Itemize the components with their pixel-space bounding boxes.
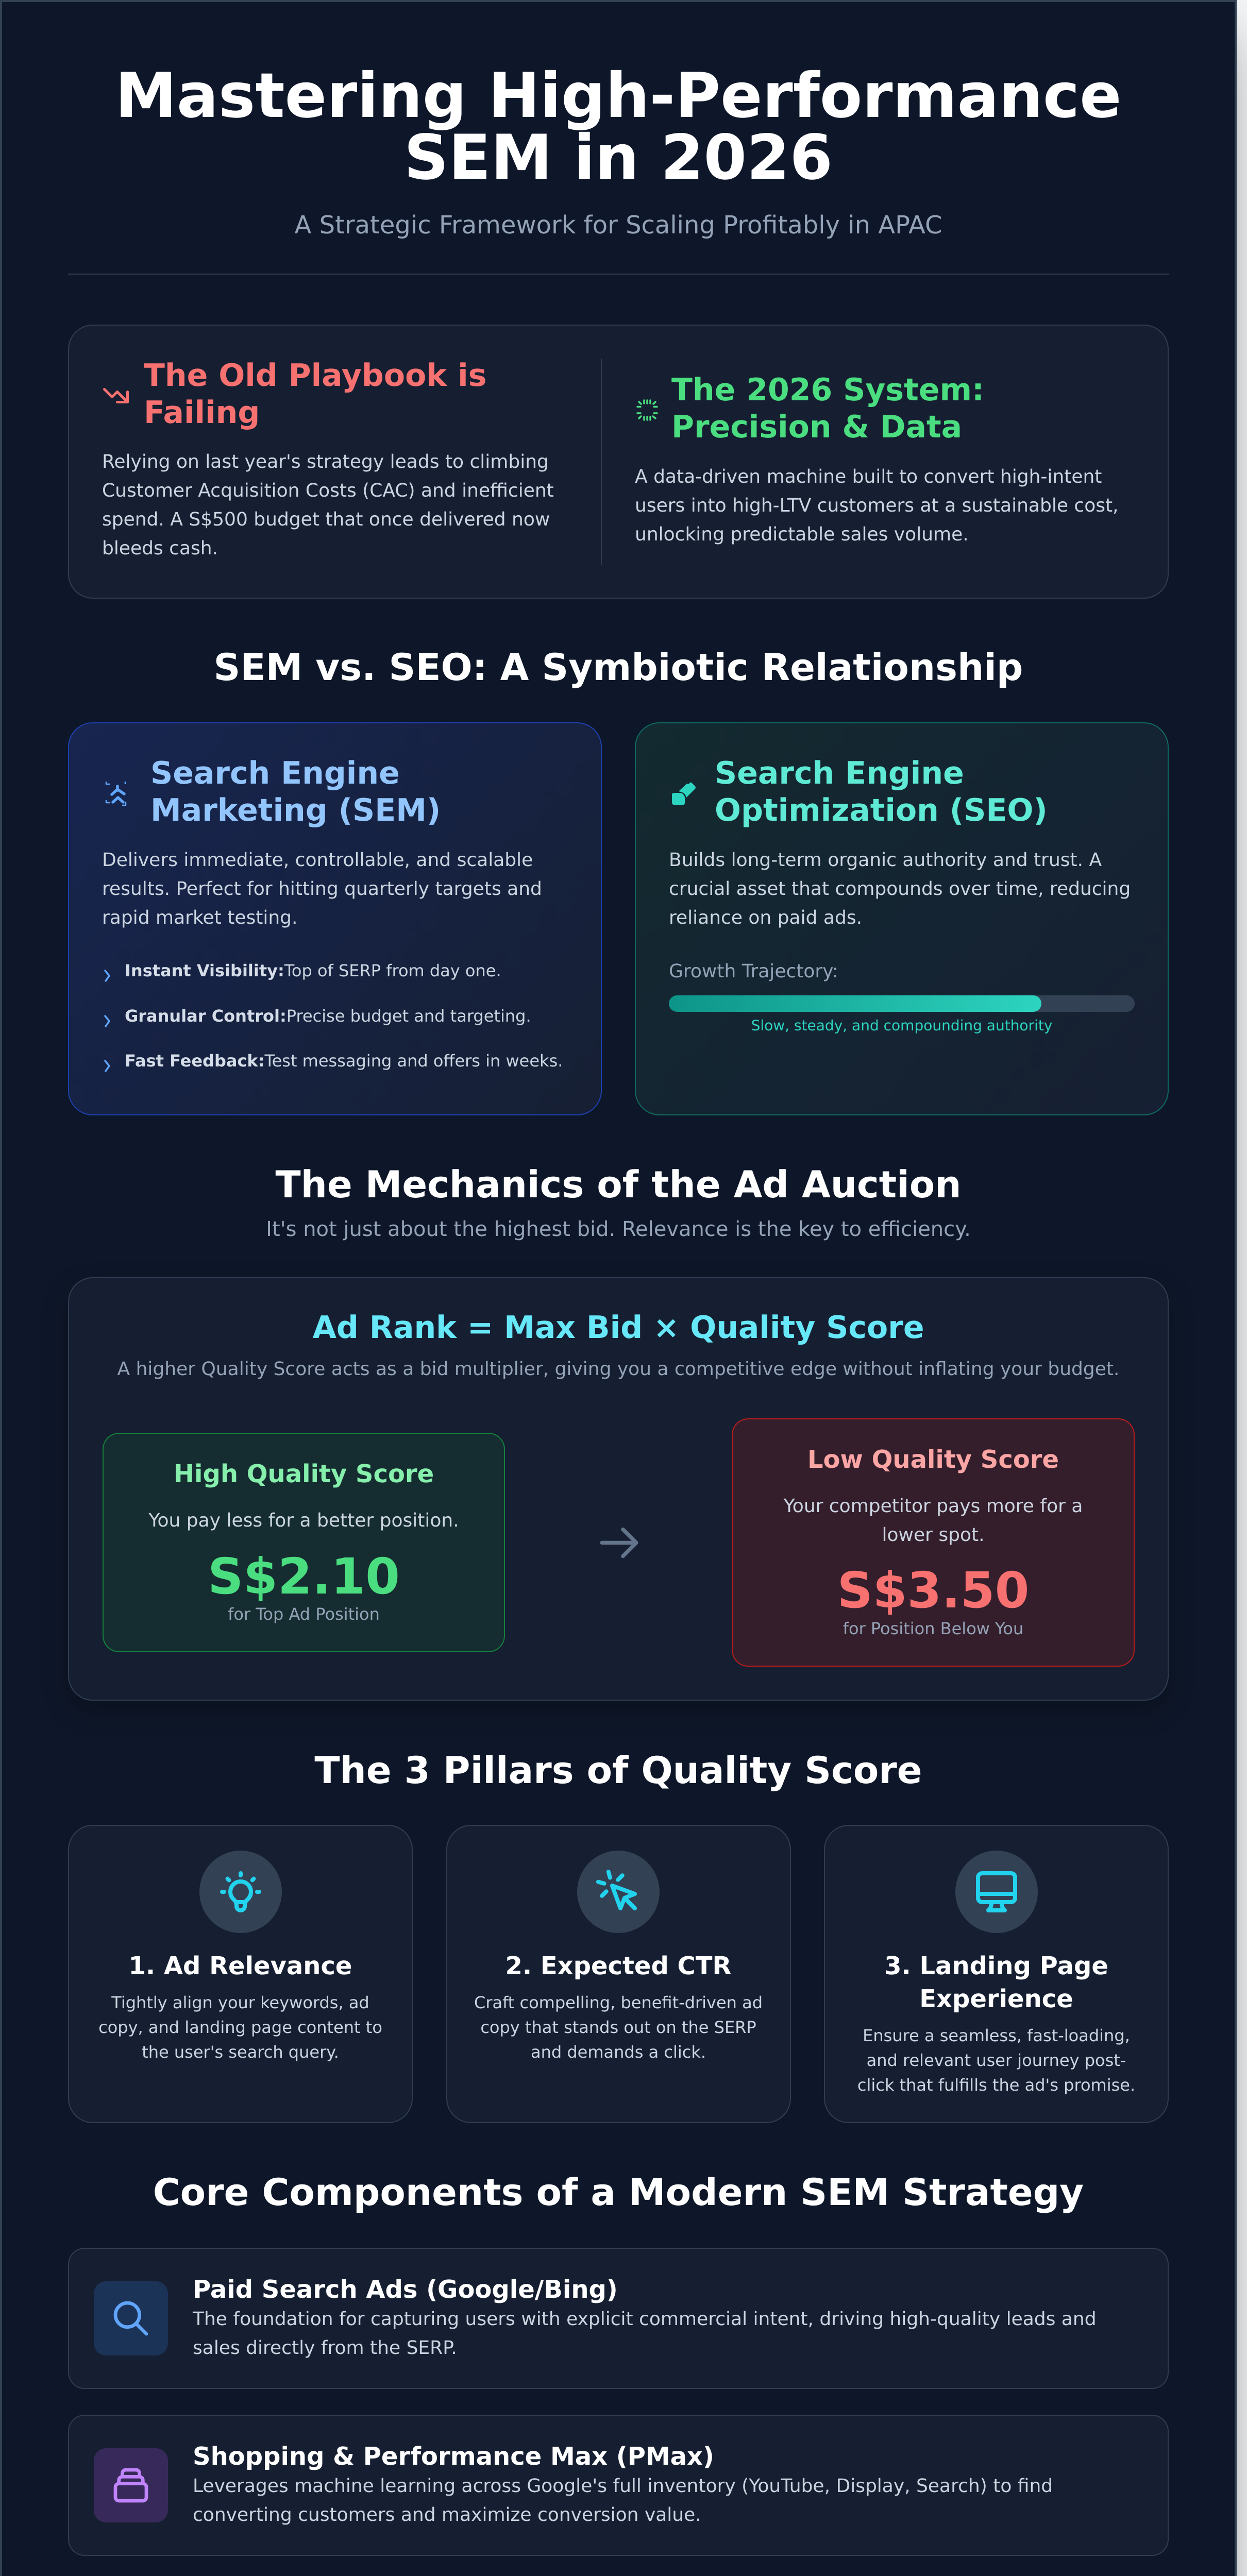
subtitle: A Strategic Framework for Scaling Profitably in APAC bbox=[295, 211, 942, 240]
card: high quality score bbox=[103, 1433, 505, 1652]
text: pillar 1 bbox=[98, 1993, 382, 2062]
panel: paid search bbox=[68, 2248, 1169, 2389]
icon: chip ring bbox=[636, 399, 658, 421]
icon: trending down bbox=[103, 388, 129, 403]
progress bar bbox=[669, 995, 1135, 1012]
text: pillar 1: the user's search query. bbox=[142, 2042, 339, 2062]
icon: cursor click bbox=[577, 1851, 660, 1933]
text: SEO: reliance on paid ads. bbox=[669, 907, 862, 928]
bullet: instant visibility: Instant Visibility:Top of SERP from day one. bbox=[125, 961, 501, 980]
text: high QS: You pay less for a better position. bbox=[148, 1510, 459, 1531]
heading: ad auction: The Mechanics of the Ad Auction bbox=[275, 1163, 962, 1206]
text: pillar 3: click that fulfills the ad's promise. bbox=[857, 2075, 1135, 2095]
text: old playbook: Relying on last year's strategy leads to climbing bbox=[102, 451, 549, 472]
heading: old playbook: The Old Playbook is bbox=[144, 358, 486, 394]
text: paid search: The foundation for capturing users with explicit commercial intent, driving high-quality leads and bbox=[193, 2309, 1097, 2330]
card: low quality score bbox=[732, 1418, 1135, 1667]
heading: paid search: Paid Search Ads (Google/Bing) bbox=[193, 2275, 618, 2304]
text: pillar 1: Tightly align your keywords, ad bbox=[111, 1993, 369, 2012]
icon: desktop computer bbox=[955, 1851, 1038, 1933]
text: old playbook: Customer Acquisition Costs (CAC) and inefficient bbox=[102, 480, 554, 501]
text: pillar 3 bbox=[824, 2023, 1169, 2097]
panel: pillar 3 bbox=[824, 1825, 1169, 2123]
title: SEM in 2026 bbox=[404, 122, 833, 194]
heading: 2026 system: Precision & Data bbox=[671, 409, 962, 445]
text: SEM: results. Perfect for hitting quarterly targets and bbox=[102, 878, 542, 900]
list: SEM benefits bbox=[104, 961, 563, 1072]
formula explanation: A higher Quality Score acts as a bid multiplier, giving you a competitive edge without inflating your budget. bbox=[117, 1359, 1119, 1380]
bullet: fast feedback: Fast Feedback:Test messaging and offers in weeks. bbox=[125, 1051, 563, 1071]
panel: SEO bbox=[635, 722, 1169, 1115]
icon: search bbox=[94, 2281, 168, 2355]
heading: low QS: Low Quality Score bbox=[807, 1445, 1059, 1474]
text: low QS: Your competitor pays more for a bbox=[784, 1496, 1083, 1517]
text: low QS bbox=[783, 1496, 1083, 1546]
text: SEO: crucial asset that compounds over time, reducing bbox=[669, 878, 1131, 900]
text: paid search: sales directly from the SERP. bbox=[193, 2337, 457, 2359]
heading: SEO: Search Engine bbox=[715, 755, 964, 791]
icon: SEM target chevrons bbox=[105, 782, 127, 806]
heading: 2026 system bbox=[671, 372, 984, 445]
text: SEO bbox=[669, 850, 1131, 928]
heading: SEM vs SEO: SEM vs. SEO: A Symbiotic Relationship bbox=[214, 646, 1023, 689]
heading: old playbook: Failing bbox=[144, 395, 260, 431]
text: pillar 1: copy, and landing page content to bbox=[98, 2018, 382, 2037]
panel: shopping and pmax bbox=[68, 2415, 1169, 2556]
text: paid search bbox=[193, 2305, 1097, 2363]
text: pillar 3: Ensure a seamless, fast-loading, bbox=[863, 2026, 1130, 2045]
note: high QS: for Top Ad Position bbox=[228, 1604, 380, 1624]
icon: SEO key shape bbox=[672, 782, 696, 805]
text: shopping and pmax bbox=[193, 2472, 1053, 2530]
heading: pillar 3 bbox=[824, 1950, 1169, 2015]
text: pillar 2: copy that stands out on the SERP bbox=[480, 2018, 756, 2037]
text: pillar 2: Craft compelling, benefit-driven ad bbox=[474, 1993, 763, 2012]
text: pillar 2 bbox=[446, 1990, 790, 2064]
heading: pillar 2: 2. Expected CTR bbox=[505, 1952, 731, 1980]
heading: high QS: High Quality Score bbox=[174, 1460, 434, 1488]
text: SEO: Builds long-term organic authority and trust. A bbox=[669, 850, 1102, 871]
panel: SEM bbox=[68, 722, 602, 1115]
heading: shopping and pmax: Shopping & Performance Max (PMax) bbox=[193, 2442, 714, 2471]
text: SEM: Delivers immediate, controllable, and scalable bbox=[102, 850, 533, 871]
text: shopping and pmax: converting customers and maximize conversion value. bbox=[193, 2504, 701, 2526]
heading: SEM: Search Engine bbox=[150, 755, 400, 791]
formula: Ad Rank = Max Bid × Quality Score bbox=[312, 1310, 924, 1346]
text: 2026 system: A data-driven machine built to convert high-intent bbox=[635, 466, 1102, 487]
text: pillar 2: and demands a click. bbox=[531, 2042, 706, 2062]
panel: pillar 2 bbox=[446, 1825, 790, 2123]
text: 2026 system: users into high-LTV customers at a sustainable cost, bbox=[635, 495, 1119, 516]
heading: SEM bbox=[150, 755, 441, 828]
panel: pillar 1 bbox=[68, 1825, 413, 2123]
text: shopping and pmax: Leverages machine learning across Google's full inventory (YouTube, Display, Search) to find bbox=[193, 2476, 1053, 2497]
heading: old playbook bbox=[144, 358, 486, 431]
text: SEM bbox=[102, 850, 542, 928]
label: growth trajectory: Growth Trajectory: bbox=[669, 961, 838, 982]
heading: pillar 1: 1. Ad Relevance bbox=[129, 1952, 352, 1980]
text: old playbook: bleeds cash. bbox=[102, 538, 218, 559]
icon: collection bbox=[94, 2448, 168, 2522]
heading: pillar 3: 3. Landing Page bbox=[884, 1952, 1108, 1980]
panel: ad rank bbox=[68, 1277, 1169, 1701]
heading: SEO: Optimization (SEO) bbox=[715, 792, 1048, 828]
text: SEM: rapid market testing. bbox=[102, 907, 297, 928]
subheading: ad auction: It's not just about the highest bid. Relevance is the key to efficiency. bbox=[266, 1217, 971, 1241]
bullet: granular control: Granular Control:Precise budget and targeting. bbox=[125, 1006, 531, 1026]
heading: SEO bbox=[715, 755, 1048, 828]
heading: pillars: The 3 Pillars of Quality Score bbox=[314, 1749, 922, 1792]
text: 2026 system bbox=[635, 466, 1119, 545]
icon: light bulb bbox=[199, 1851, 281, 1933]
caption: progress bar: Slow, steady, and compounding authority bbox=[751, 1017, 1052, 1034]
heading: core components: Core Components of a Modern SEM Strategy bbox=[153, 2171, 1084, 2214]
title bbox=[115, 60, 1121, 194]
heading: pillar 3: Experience bbox=[919, 1985, 1073, 2013]
text: old playbook bbox=[102, 451, 554, 559]
price: high QS: S$2.10 bbox=[208, 1548, 400, 1605]
heading: SEM: Marketing (SEM) bbox=[150, 792, 441, 828]
price: low QS: S$3.50 bbox=[837, 1562, 1029, 1619]
text: old playbook: spend. A S$500 budget that once delivered now bbox=[102, 509, 550, 530]
text: low QS: lower spot. bbox=[882, 1524, 985, 1546]
bar fill bbox=[669, 995, 1041, 1012]
title: Mastering High-Performance bbox=[115, 60, 1121, 132]
text: 2026 system: unlocking predictable sales volume. bbox=[635, 524, 969, 545]
note: low QS: for Position Below You bbox=[843, 1619, 1023, 1638]
heading: 2026 system: The 2026 System: bbox=[671, 372, 984, 408]
text: pillar 3: and relevant user journey post- bbox=[867, 2050, 1126, 2070]
icon: arrow bbox=[600, 1527, 638, 1558]
panel: old playbook vs 2026 system bbox=[68, 325, 1169, 599]
